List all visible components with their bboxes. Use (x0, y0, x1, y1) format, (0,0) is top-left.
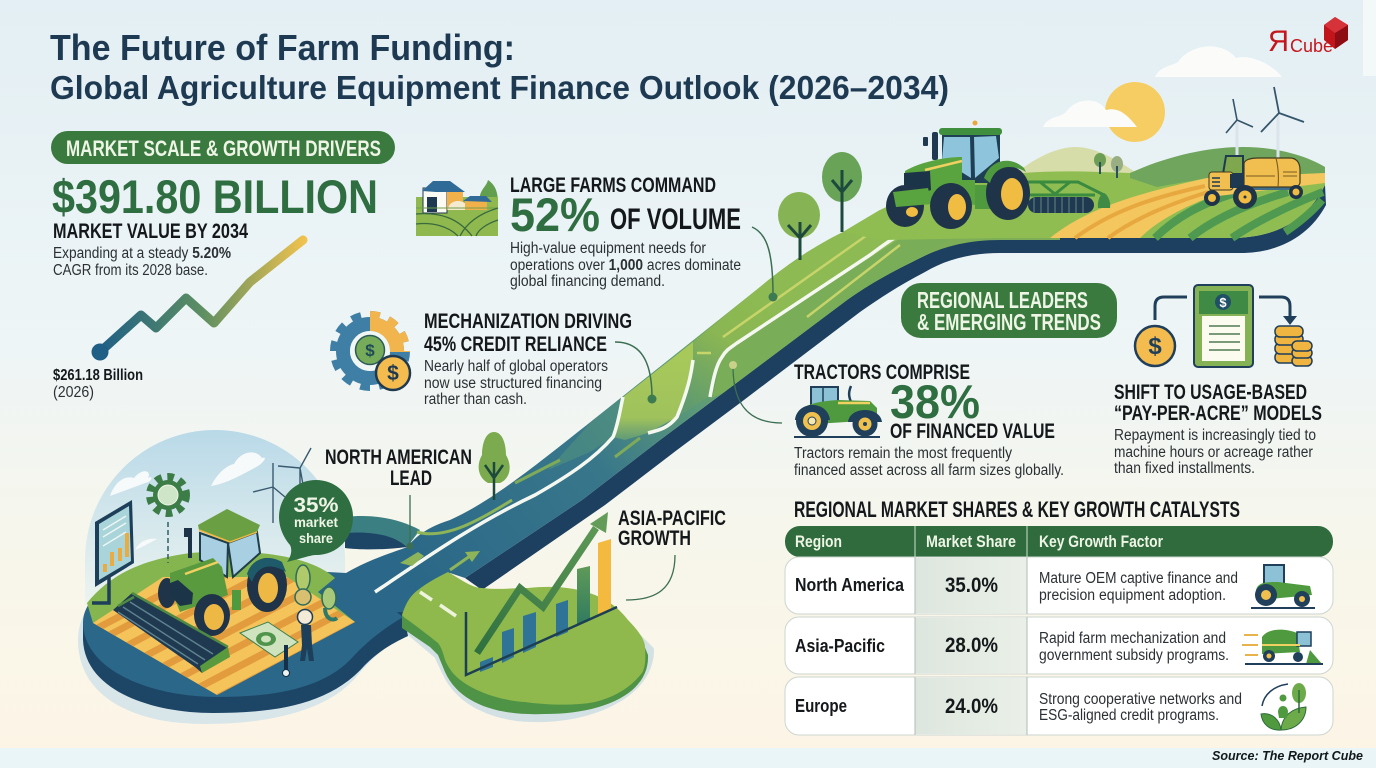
stat: 52 percent: 52% (510, 188, 600, 241)
description: CAGR from its 2028 base. (53, 262, 208, 279)
icon: farmer (282, 610, 314, 676)
grass field (87, 551, 355, 623)
heading pill: market scale: MARKET SCALE & GROWTH DRIVERS (66, 136, 381, 161)
logo: RCube (1268, 17, 1348, 58)
icon: tractor (794, 386, 882, 437)
callout bubble: 35 percent (279, 480, 353, 562)
description: Nearly half of global operators (424, 358, 608, 375)
heading: 45% CREDIT RELIANCE (424, 333, 607, 356)
label: North American lead: NORTH AMERICAN (325, 446, 472, 469)
description: operations over 1,000 acres dominate (510, 257, 741, 274)
icon: road tree (479, 432, 510, 500)
title: Global Agriculture Equipment Finance Outlook (2026–2034) (50, 69, 949, 106)
description (53, 245, 231, 279)
leader line (752, 227, 778, 302)
table header: Key Growth Factor (1039, 532, 1163, 551)
title: The Future of Farm Funding: (50, 27, 515, 68)
icon: plants and coin (295, 565, 337, 620)
description (510, 240, 741, 290)
icon: wind turbines (1226, 87, 1304, 158)
icon: combine harvester (1242, 630, 1323, 664)
icon: gear with coins: $ (387, 362, 399, 385)
row: Asia-Pacific: Asia-Pacific (795, 636, 885, 656)
line chart (92, 240, 303, 360)
description: now use structured financing (424, 375, 602, 392)
heading pill: market scale (51, 131, 395, 164)
road lower green section (712, 232, 950, 398)
description (424, 358, 608, 408)
row: Asia-Pacific: government subsidy programs. (1039, 647, 1229, 664)
description: financed asset across all farm sizes globally. (794, 462, 1064, 479)
label: Asia-Pacific growth: ASIA-PACIFIC (618, 507, 726, 530)
striped crop field (93, 577, 355, 695)
icon: pay-per-use contract: $ (1219, 295, 1227, 310)
row: North America: precision equipment adoption. (1039, 587, 1226, 604)
icon: large green tractor with implement (886, 120, 1110, 229)
table header: Region (795, 532, 842, 551)
right island: Asia-Pacific growth (402, 512, 648, 714)
leader line (729, 361, 782, 423)
source note: Source: The Report Cube (1212, 748, 1363, 763)
baseline label (53, 367, 143, 401)
title (50, 27, 949, 106)
icon: tractor (1251, 565, 1315, 608)
callout: tractors (729, 361, 1064, 479)
heading: LARGE FARMS COMMAND (510, 174, 716, 197)
left island: North America scene (83, 448, 408, 713)
description: rather than cash. (424, 391, 527, 408)
road lime section (613, 342, 693, 440)
icon: pay-per-use contract (1135, 285, 1312, 367)
road: winding finance road (345, 185, 1326, 640)
icon: trees on hillside (778, 152, 862, 260)
big figure: $391.80 BILLION (52, 170, 378, 223)
callout: usage-based models: SHIFT TO USAGE-BASED (1114, 381, 1307, 404)
icon: gear with coins (335, 316, 410, 390)
implement (1025, 182, 1110, 213)
row: North America (785, 557, 1333, 614)
icon: harvester header (113, 593, 230, 673)
icon: gear badge (150, 477, 186, 563)
callout: usage-based models: machine hours or acreage rather (1114, 444, 1313, 461)
icon: sustainability leaves (1261, 683, 1306, 730)
stat label: OF FINANCED VALUE (890, 420, 1055, 443)
row: Asia-Pacific (785, 617, 1333, 674)
row: North America: North America (795, 575, 905, 595)
label: North American lead (325, 446, 472, 550)
subheading: MARKET VALUE BY 2034 (53, 220, 248, 243)
row: Asia-Pacific: 28.0% (945, 634, 998, 657)
table: regional market shares (785, 497, 1333, 735)
callout: usage-based models: than fixed installments. (1114, 460, 1255, 477)
icon: pay-per-use contract: $ (1148, 333, 1162, 360)
row: Europe: ESG-aligned credit programs. (1039, 707, 1219, 724)
navy road edge (465, 185, 1326, 590)
description: High-value equipment needs for (510, 240, 706, 257)
heading (424, 310, 632, 356)
description: Tractors remain the most frequently (794, 445, 1012, 462)
heading: TRACTORS COMPRISE (794, 361, 970, 384)
logo: RCube: Я (1268, 25, 1289, 58)
description: global financing demand. (510, 273, 665, 290)
row: Europe (785, 677, 1333, 735)
road lane markings (375, 231, 910, 592)
icon: wind turbines (253, 448, 311, 523)
callout: mechanization (335, 310, 656, 408)
callout bubble: 35 percent: share (299, 530, 333, 546)
island halos (84, 564, 410, 718)
label: North American lead: LEAD (390, 467, 432, 490)
road loop (345, 516, 420, 549)
heading pill: regional leaders (901, 283, 1117, 338)
heading pill: regional leaders: REGIONAL LEADERS (917, 287, 1088, 313)
panel: market scale and growth drivers (51, 131, 395, 401)
label: Asia-Pacific growth: GROWTH (618, 527, 691, 550)
row: North America: 35.0% (945, 574, 998, 597)
scenery: distant farmland (843, 147, 1325, 240)
icon: money sheet (240, 622, 298, 657)
logo: RCube: Cube (1290, 36, 1333, 56)
table header (785, 526, 1333, 557)
island rim (83, 612, 408, 713)
baseline label: $261.18 Billion (53, 367, 143, 384)
leader line (615, 342, 656, 404)
icon: farm (416, 180, 498, 236)
description (794, 445, 1064, 479)
road upper green section (677, 210, 920, 417)
label: Asia-Pacific growth (618, 507, 726, 600)
table header: Market Share (926, 532, 1016, 551)
road teal section (548, 397, 623, 470)
callout bubble: 35 percent: market (294, 514, 338, 530)
growth bar chart (466, 512, 617, 675)
island surface (402, 572, 645, 705)
callout: usage-based models: Repayment is increasingly tied to (1114, 427, 1316, 444)
road dashes (697, 233, 900, 353)
stat: 38 percent: 38% (890, 375, 980, 428)
icon: monitor with chart (92, 500, 134, 603)
icon: tractor (158, 509, 287, 636)
row: Asia-Pacific: Rapid farm mechanization and (1039, 630, 1226, 647)
heading: MECHANIZATION DRIVING (424, 310, 632, 333)
callout: usage-based models (1114, 381, 1322, 477)
row: Europe: Europe (795, 696, 847, 716)
road arrows (400, 438, 640, 570)
stat label: OF VOLUME (610, 203, 741, 236)
row: Europe: 24.0% (945, 695, 998, 718)
description: Expanding at a steady 5.20% (53, 245, 231, 262)
heading pill: regional leaders: & EMERGING TRENDS (917, 309, 1101, 335)
scenery: sun and clouds (1043, 46, 1282, 142)
baseline label: (2026) (53, 384, 94, 401)
row: North America: Mature OEM captive finance and (1039, 570, 1238, 587)
callout bubble: 35 percent: 35% (294, 494, 339, 517)
road surface (346, 205, 1060, 640)
scenery: left island sky dome (85, 430, 345, 605)
row: Europe: Strong cooperative networks and (1039, 691, 1242, 708)
callout: large farms (416, 174, 778, 302)
striped field (1155, 192, 1323, 238)
island rim (402, 615, 648, 714)
island surface (83, 565, 403, 697)
icon: gear with coins: $ (365, 341, 375, 360)
icon: small yellow tractor with hay (1204, 156, 1303, 209)
